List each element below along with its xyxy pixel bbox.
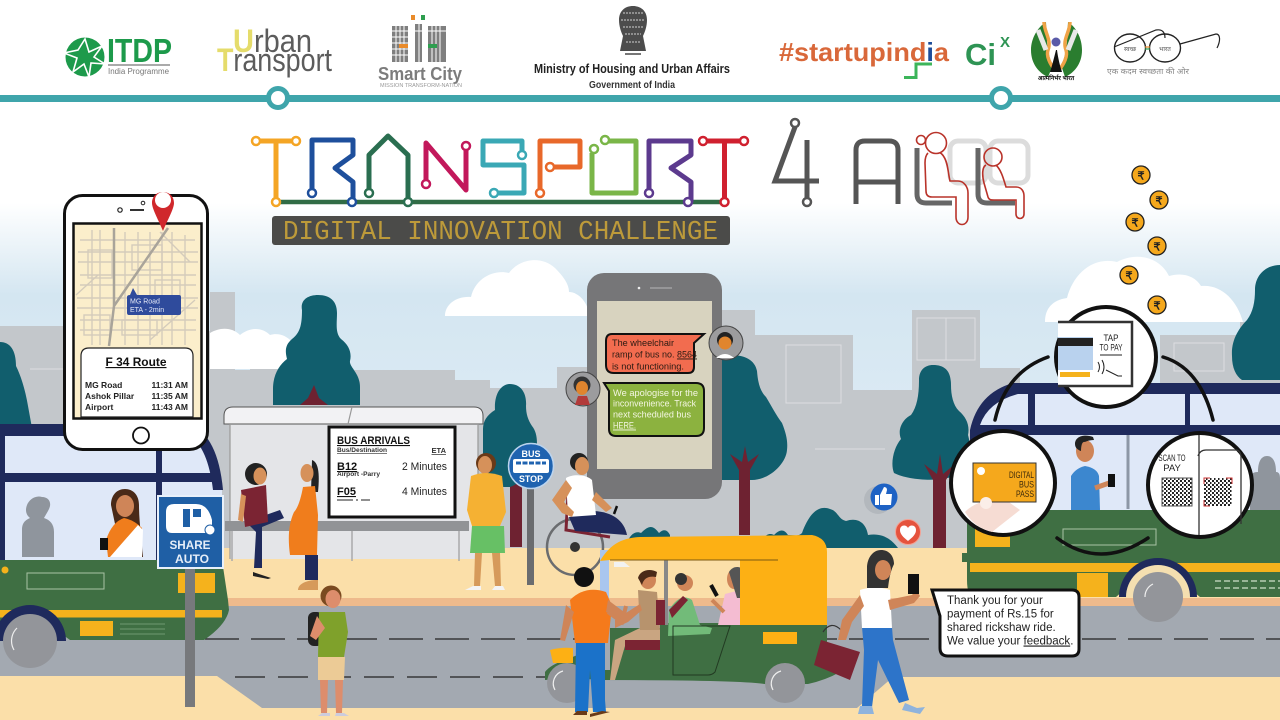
logo: Swachh Bharat glasses: एक कदम स्वच्छता की ओर bbox=[1107, 66, 1190, 76]
bus frame bbox=[0, 424, 223, 490]
bus stop sign: BUS bbox=[522, 449, 540, 459]
logo: Swachh Bharat glasses: भारत bbox=[1159, 47, 1171, 53]
route timetable card: 11:35 AM bbox=[151, 391, 188, 401]
logo: Urban Transport bbox=[217, 23, 332, 78]
rupee coins: ₹ bbox=[1156, 196, 1162, 208]
bus frame bbox=[970, 383, 1280, 510]
share auto sign: SHARE bbox=[170, 540, 211, 552]
tree: behind grey phone bbox=[722, 355, 787, 535]
letter R bbox=[308, 140, 356, 206]
share auto sign: AUTO bbox=[175, 554, 209, 566]
passenger outline one bbox=[916, 132, 968, 224]
logo: Smart City: MISSION TRANSFORM-NATION bbox=[380, 83, 462, 89]
bus stop sign bbox=[508, 444, 554, 585]
trees bbox=[0, 265, 1280, 557]
payment circle: tap to pay: TAP bbox=[1104, 333, 1118, 344]
chat bubble: complaint bbox=[606, 334, 704, 373]
payment circle: digital bus pass bbox=[951, 431, 1055, 535]
grey silhouette passenger bbox=[1250, 456, 1280, 510]
rupee coins: ₹ bbox=[1126, 270, 1132, 282]
bus windows bbox=[973, 394, 1280, 510]
letter N bbox=[422, 142, 470, 190]
logo: ITDP: ITDP bbox=[107, 32, 172, 69]
tree: bus stop bbox=[483, 384, 537, 547]
header: partner logos bbox=[64, 6, 1220, 91]
person: seated woman bbox=[238, 463, 284, 579]
logo: Swachh Bharat glasses bbox=[1107, 30, 1220, 76]
route timetable card: 11:43 AM bbox=[151, 402, 188, 412]
payment circle: digital bus pass: DIGITAL bbox=[1009, 470, 1034, 481]
chat bubble: complaint: The wheelchair bbox=[612, 338, 674, 348]
auto driver bbox=[610, 570, 665, 680]
lower sidewalk bbox=[0, 606, 1280, 720]
left bus bbox=[0, 424, 229, 668]
letter P bbox=[536, 141, 580, 197]
phone with route map bbox=[64, 192, 208, 450]
avatar: commuter bbox=[709, 326, 743, 360]
grey silhouette passenger bbox=[22, 497, 54, 557]
bus arrivals display board: Bus/Destination bbox=[337, 447, 387, 454]
auto passengers bbox=[668, 567, 741, 636]
bus body bbox=[0, 560, 229, 640]
route timetable card: Airport bbox=[85, 402, 114, 412]
letter T second bbox=[699, 137, 748, 206]
tree: far left bbox=[0, 342, 32, 428]
payment circle: digital bus pass: PASS bbox=[1016, 489, 1034, 500]
person: woman in sari bbox=[100, 489, 143, 557]
letter A bbox=[365, 136, 412, 206]
reaction: thumbs up bbox=[864, 484, 898, 514]
person: man in orange shirt bbox=[560, 567, 626, 717]
bus arrivals display board: BUS ARRIVALS bbox=[337, 435, 410, 447]
payment option connectors bbox=[995, 357, 1213, 554]
chat bubble: complaint: ramp of bus no. 8564 bbox=[612, 350, 697, 360]
rear wheel bbox=[0, 605, 66, 668]
chat bubble: reply: We apologise for the bbox=[613, 388, 698, 398]
passenger outline two bbox=[983, 148, 1024, 218]
logo: Smart City: Smart City bbox=[378, 64, 462, 84]
letter T bbox=[252, 137, 300, 206]
bushes bbox=[627, 508, 898, 548]
tree: far right bbox=[1232, 265, 1280, 380]
bus arrivals display board: B12 bbox=[337, 461, 357, 473]
person: passenger with phone bbox=[1071, 436, 1115, 510]
auto plate bbox=[763, 632, 797, 644]
auto windscreen frame bbox=[600, 550, 609, 630]
auto wheels bbox=[547, 663, 805, 703]
route timetable card: Ashok Pillar bbox=[85, 391, 135, 401]
logo: Azadi emblem bbox=[1031, 22, 1082, 82]
road bbox=[0, 606, 1280, 708]
logo: CiX: Ci bbox=[965, 37, 996, 72]
payment circle: scan to pay bbox=[1148, 433, 1252, 537]
map screen bbox=[74, 224, 202, 418]
feedback message bubble: payment of Rs.15 for bbox=[947, 608, 1054, 620]
letter L and seat bbox=[917, 148, 952, 203]
sky background bbox=[0, 180, 1280, 410]
bus stop sign: STOP bbox=[519, 474, 543, 484]
map ETA callout bbox=[127, 288, 181, 315]
bus arrivals display board: 2 Minutes bbox=[402, 461, 447, 473]
person: woman walking with phone bbox=[814, 550, 925, 714]
letter S bbox=[483, 141, 526, 197]
feedback message bubble: shared rickshaw ride. bbox=[947, 622, 1056, 634]
tree: behind shelter bbox=[273, 295, 360, 405]
share auto sign bbox=[158, 496, 223, 707]
auto body bbox=[545, 623, 840, 684]
title: TRANSPORT metro-line lettering bbox=[252, 136, 748, 206]
bus arrivals display board: 4 Minutes bbox=[402, 486, 447, 498]
city buildings bbox=[0, 292, 1280, 560]
payment circle: scan to pay: SCAN TO bbox=[1158, 453, 1186, 464]
payment circle: scan to pay: PAY bbox=[1163, 463, 1181, 474]
bus arrivals display board: ETA bbox=[432, 446, 447, 455]
route timetable card: MG Road bbox=[85, 380, 122, 390]
rupee coins: ₹ bbox=[1132, 218, 1138, 230]
maroon handbag bbox=[814, 625, 860, 680]
bus shelter bbox=[224, 407, 483, 561]
payment circle: tap to pay: TO PAY bbox=[1100, 342, 1123, 354]
reaction: heart bbox=[896, 520, 920, 544]
chat bubble: reply: next scheduled bus bbox=[613, 410, 691, 420]
logo: CiX: X bbox=[1000, 34, 1010, 51]
logo: Swachh Bharat glasses: स्वच्छ bbox=[1124, 47, 1137, 53]
bus arrivals display board bbox=[329, 427, 455, 517]
title: 4 ALL with seats and passengers bbox=[775, 119, 1028, 224]
seat backs bbox=[950, 141, 1028, 183]
person: pregnant woman in orange bbox=[289, 460, 319, 590]
logo: ITDP: India Programme bbox=[108, 67, 170, 76]
feedback message bubble bbox=[932, 590, 1079, 656]
chat bubble: reply: HERE. bbox=[613, 420, 636, 430]
auto rickshaw bbox=[545, 535, 840, 703]
payment circle: digital bus pass: BUS bbox=[1019, 480, 1034, 490]
logo: CiX bbox=[965, 34, 1010, 72]
logo: Ministry of Housing and Urban Affairs: Ministry of Housing and Urban Affairs bbox=[534, 61, 730, 76]
feedback message bubble: We value your feedback. bbox=[947, 636, 1073, 648]
subtitle board: digital innovation challenge: DIGITAL INNOVATION CHALLENGE bbox=[283, 218, 718, 248]
logo: Azadi emblem: आत्मनिर्भर भारत bbox=[1038, 74, 1075, 82]
avatar: operator bbox=[566, 372, 600, 406]
header metro line with stations bbox=[0, 88, 1280, 108]
route timetable card: 11:31 AM bbox=[151, 380, 188, 390]
chat bubble: reply bbox=[604, 383, 704, 436]
logo: Ministry of Housing and Urban Affairs: Government of India bbox=[589, 80, 675, 91]
rupee coins: ₹ bbox=[1154, 300, 1160, 312]
logo: Urban Transport: Transport bbox=[217, 42, 332, 78]
map ETA callout: ETA - 2min bbox=[130, 307, 164, 314]
logo: ITDP bbox=[64, 32, 172, 77]
chat bubble: complaint: is not functioning. bbox=[612, 362, 684, 372]
logo: startup india: #startupindia bbox=[779, 37, 950, 67]
route timetable card: F 34 Route bbox=[106, 357, 166, 369]
bus windows bbox=[0, 436, 222, 560]
feedback message bubble: Thank you for your bbox=[947, 595, 1043, 607]
letter L second and seat bbox=[978, 148, 1015, 203]
icon: map pin bbox=[152, 192, 174, 231]
rupee coins: ₹ bbox=[1154, 242, 1160, 254]
auto roof bbox=[600, 535, 827, 625]
logo: Smart City bbox=[378, 15, 462, 89]
person: child with backpack bbox=[308, 586, 349, 716]
logo: Urban Transport: Urban bbox=[233, 23, 312, 59]
rupee coins: ₹ bbox=[1138, 170, 1144, 182]
person: man in yellow shirt bbox=[465, 453, 506, 590]
bus arrivals display board: F05 bbox=[337, 486, 356, 498]
chat bubble: reply: inconvenience. Track bbox=[613, 398, 696, 408]
payment circle: tap to pay bbox=[1056, 307, 1156, 407]
logo: Ministry of Housing and Urban Affairs bbox=[534, 6, 730, 91]
bus body bbox=[967, 510, 1280, 597]
clouds bbox=[210, 257, 1243, 369]
right bus bbox=[962, 383, 1280, 622]
rupee coins bbox=[1120, 166, 1168, 314]
numeral 4 bbox=[775, 119, 819, 206]
front wheel bbox=[1119, 558, 1197, 622]
letter A bbox=[856, 141, 898, 204]
auto door bbox=[673, 626, 730, 675]
letter R second bbox=[645, 141, 692, 206]
route timetable card bbox=[81, 348, 193, 417]
person: wheelchair user bbox=[547, 453, 630, 575]
letter O bbox=[590, 136, 636, 193]
map ETA callout: MG Road bbox=[130, 298, 160, 306]
grey smartphone with chat bbox=[566, 273, 743, 499]
road lane dashes bbox=[205, 639, 1280, 677]
bus arrivals display board: Airport -Parry bbox=[337, 471, 380, 478]
tree: right of road bbox=[892, 365, 970, 557]
upper sidewalk and curb bbox=[0, 548, 1280, 606]
